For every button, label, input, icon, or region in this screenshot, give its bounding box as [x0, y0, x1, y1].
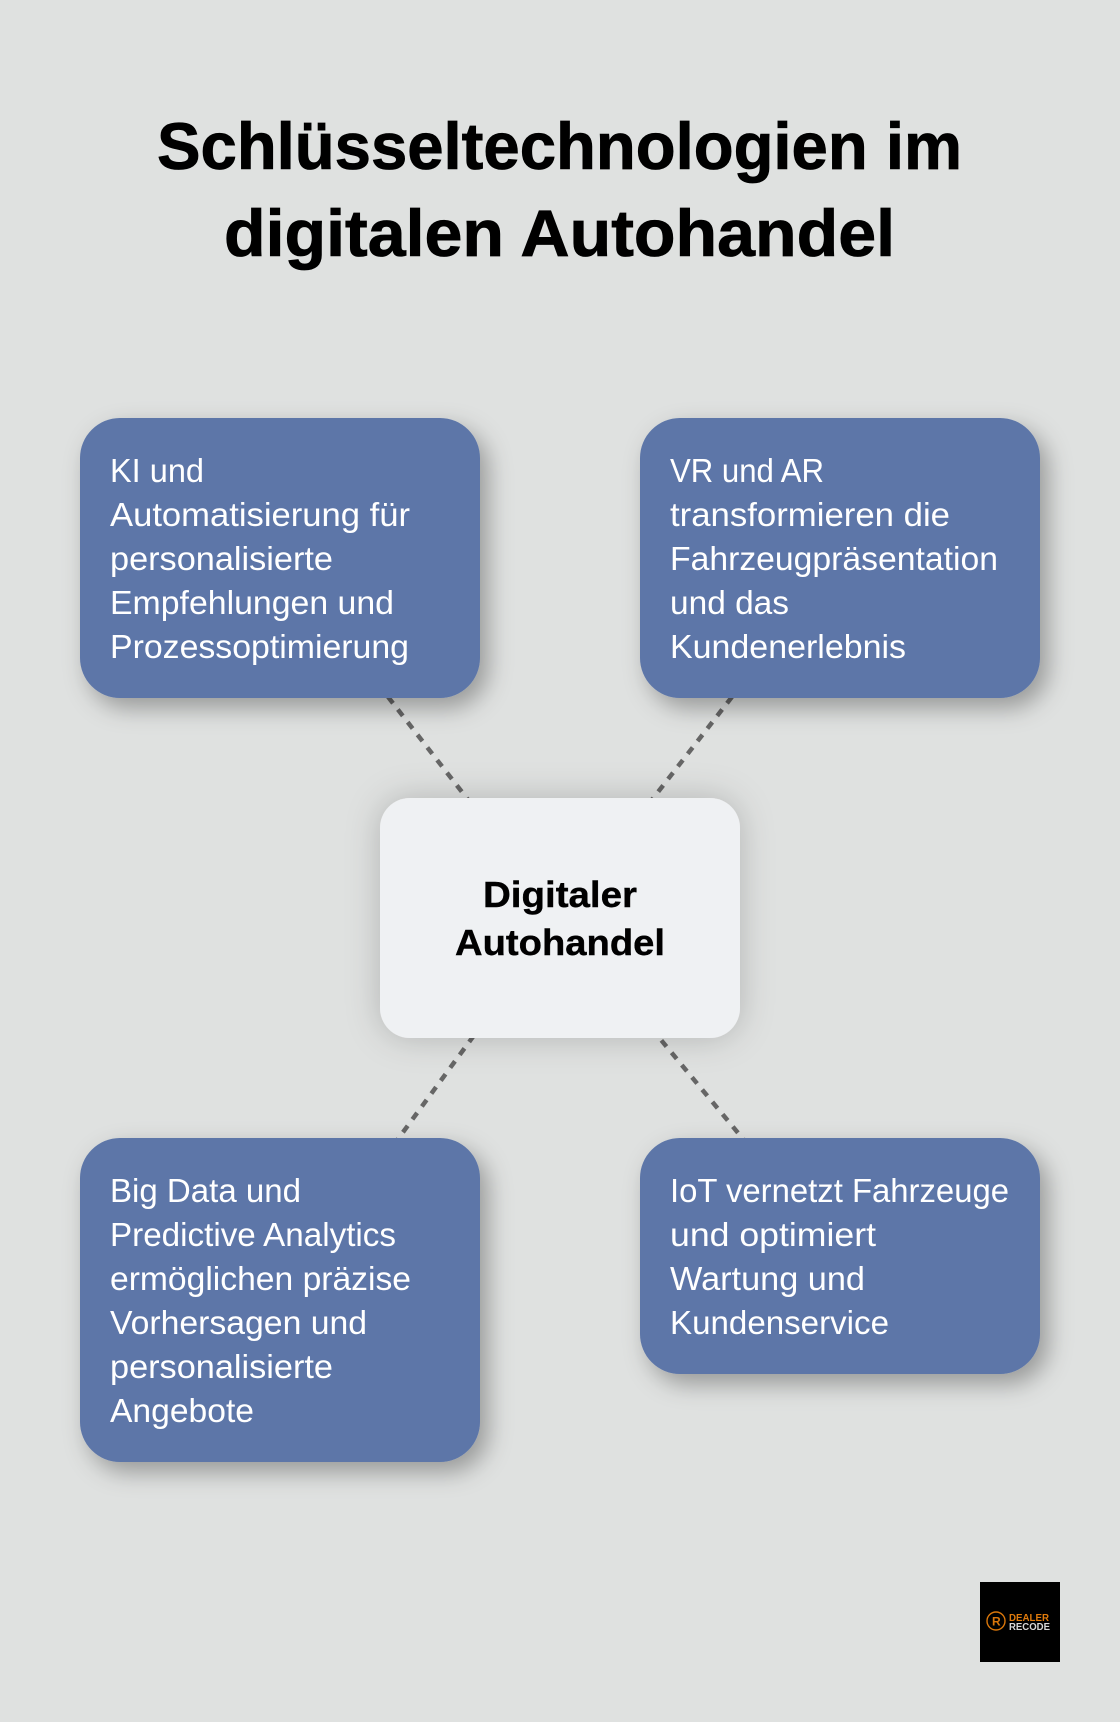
panel: VR und AR	[640, 418, 1040, 698]
title	[157, 109, 962, 270]
logo: Dealer Recode: DEALER	[1009, 1612, 1049, 1624]
panel: VR und AR: transformieren die	[670, 496, 950, 533]
panel: Digitaler Autohandel center: Autohandel	[455, 922, 665, 963]
panel: KI und Automatisierung: Automatisierung für	[110, 496, 410, 533]
panel: VR und AR: und das	[670, 584, 789, 621]
connector: top right	[560, 558, 840, 918]
panel: VR und AR: Fahrzeugpräsentation	[670, 540, 998, 577]
panel: Big Data	[80, 1138, 480, 1462]
panel: Big Data: Big Data und	[110, 1172, 301, 1209]
panel: KI und Automatisierung: personalisierte	[110, 540, 333, 577]
panel: VR und AR: VR und AR	[670, 452, 824, 489]
panel: Big Data: ermöglichen präzise	[110, 1260, 411, 1297]
panel: Big Data: personalisierte	[110, 1348, 333, 1385]
panel: IoT: Kundenservice	[670, 1304, 889, 1341]
panel: Digitaler Autohandel center: Digitaler	[483, 874, 637, 915]
panel: IoT	[640, 1138, 1040, 1374]
title: Schlüsseltechnologien im	[157, 109, 962, 183]
panel: KI und Automatisierung	[80, 418, 480, 698]
panel: Big Data: Predictive Analytics	[110, 1216, 396, 1253]
panel: Digitaler Autohandel center	[380, 798, 740, 1038]
panel: Big Data: Angebote	[110, 1392, 254, 1429]
panel: Big Data: Vorhersagen und	[110, 1304, 367, 1341]
logo: Dealer Recode: RECODE	[1009, 1621, 1050, 1633]
logo: Dealer Recode: R	[992, 1614, 1001, 1628]
connector: bottom left	[280, 918, 560, 1300]
panel: KI und Automatisierung: Prozessoptimierung	[110, 628, 409, 665]
panel: IoT: IoT vernetzt Fahrzeuge	[670, 1172, 1009, 1209]
connector: top left	[280, 558, 560, 918]
title: digitalen Autohandel	[224, 196, 895, 270]
panel: IoT: Wartung und	[670, 1260, 865, 1297]
logo: Dealer Recode	[980, 1582, 1060, 1662]
panel: KI und Automatisierung: KI und	[110, 452, 204, 489]
panel: KI und Automatisierung: Empfehlungen und	[110, 584, 394, 621]
connector: bottom right	[560, 918, 840, 1256]
panel: VR und AR: Kundenerlebnis	[670, 628, 906, 665]
panel: IoT: und optimiert	[670, 1216, 876, 1253]
